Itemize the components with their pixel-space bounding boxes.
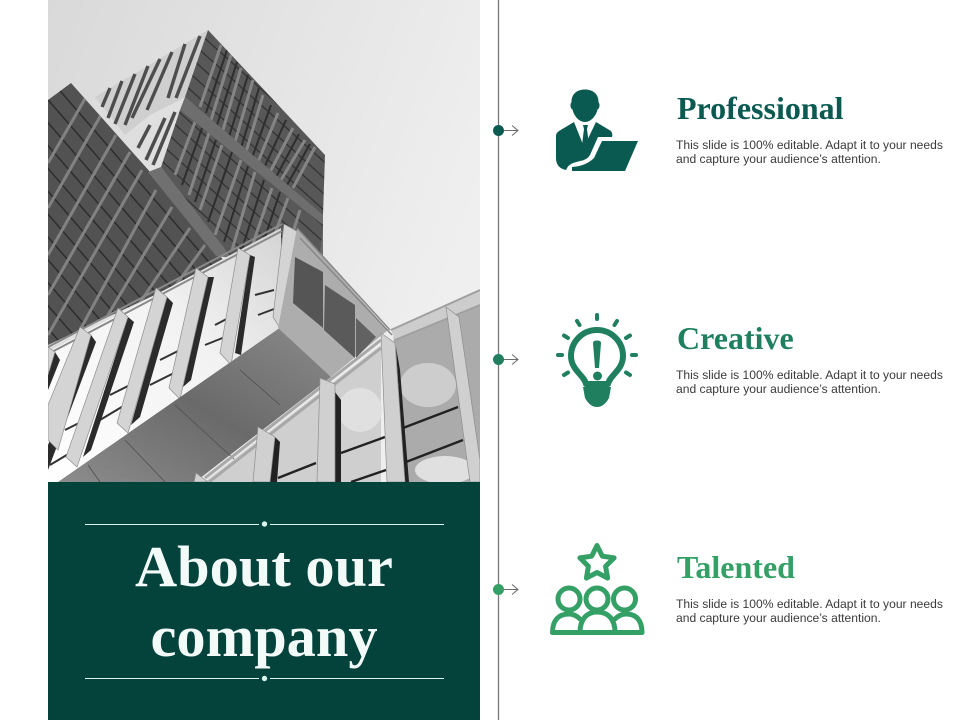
title divider top — [85, 521, 444, 527]
text: professional description: This slide is 100% editable. Adapt it to your needs — [676, 138, 943, 152]
title: About our — [135, 534, 393, 599]
text: professional description — [676, 138, 943, 166]
icon: light bulb with exclamation — [556, 313, 638, 407]
panel: title block — [48, 482, 480, 720]
beam soffit — [58, 327, 331, 482]
lower white panels — [48, 228, 281, 482]
title: company — [150, 604, 378, 669]
icon: star above team — [550, 543, 644, 635]
timeline with dots and arrows — [493, 0, 519, 720]
title divider bottom — [85, 676, 444, 682]
text: talented description — [676, 597, 943, 625]
photo: office building — [48, 0, 480, 482]
text: creative description: and capture your audience’s attention. — [676, 382, 881, 396]
upper tower block — [161, 30, 325, 262]
upper light slats — [95, 30, 208, 167]
heading: Talented: Talented — [677, 549, 795, 585]
title — [135, 534, 393, 669]
fins — [48, 224, 298, 467]
text: talented description: and capture your audience’s attention. — [676, 611, 881, 625]
text: professional description: and capture your audience’s attention. — [676, 152, 881, 166]
fin shadows — [48, 255, 255, 470]
corner box with dark windows — [278, 228, 392, 377]
text: talented description: This slide is 100% editable. Adapt it to your needs — [676, 597, 943, 611]
text: creative description — [676, 368, 943, 396]
glass wing with reflections — [194, 290, 480, 484]
text: creative description: This slide is 100% editable. Adapt it to your needs — [676, 368, 943, 382]
sky — [48, 0, 480, 482]
rail — [48, 224, 282, 354]
icon: professional with laptop — [556, 90, 638, 171]
left tower block — [48, 83, 232, 345]
heading: Professional: Professional — [677, 90, 844, 126]
heading: Creative: Creative — [677, 320, 794, 356]
